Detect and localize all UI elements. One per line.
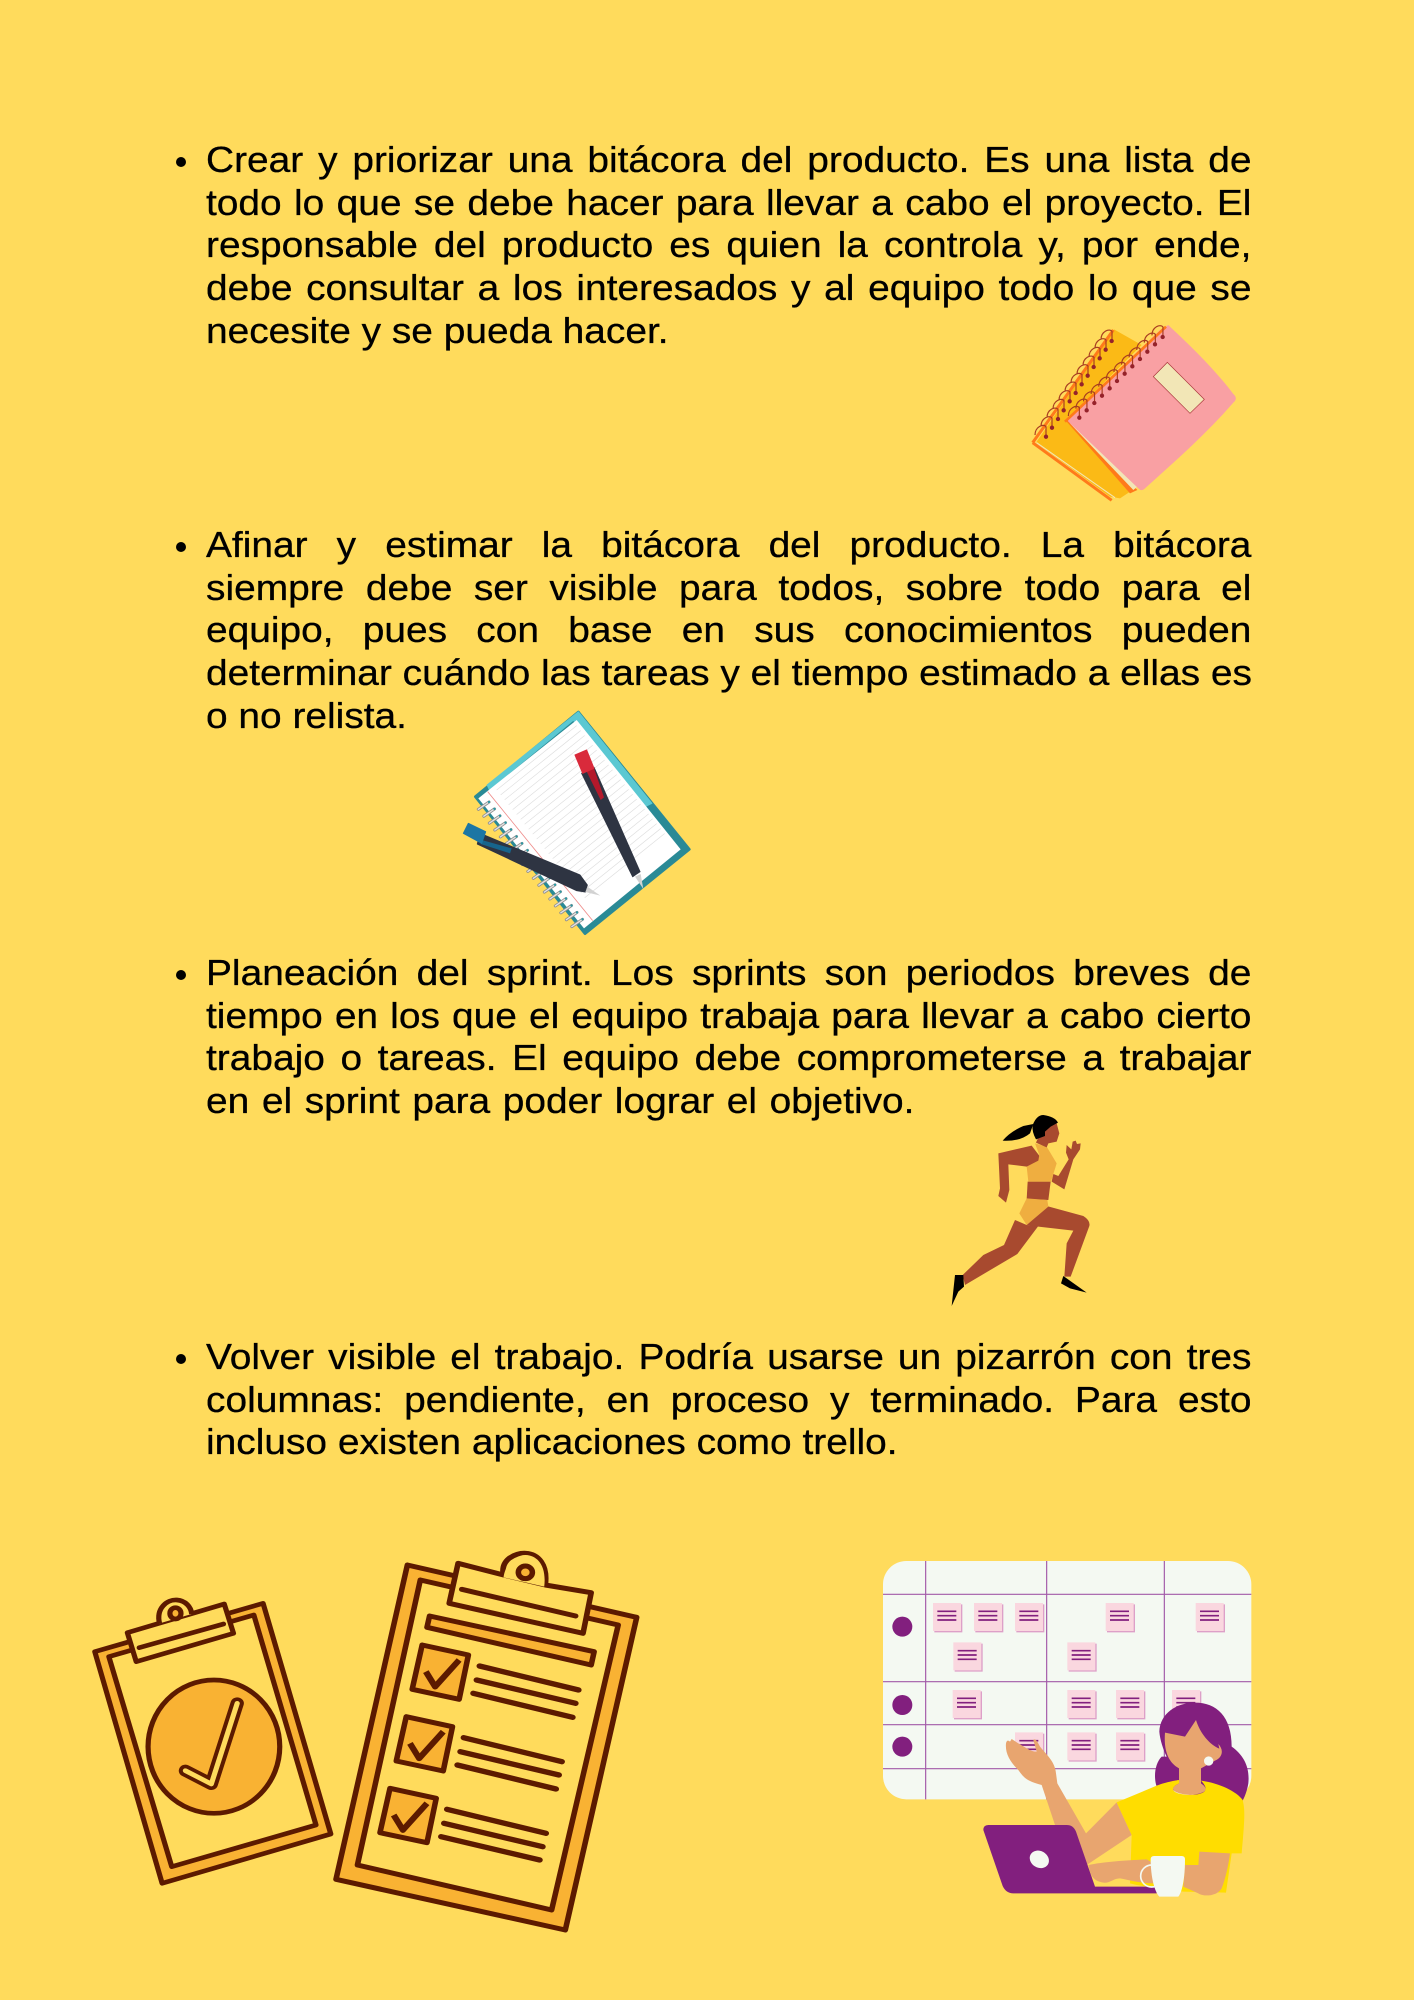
text block: afinar y estimar (176, 524, 1252, 736)
text block: afinar y estimar: Afinar y estimar la bitácora del producto. La bitácora (206, 524, 1251, 565)
text block: planeación del sprint: tiempo en los que el equipo trabaja para llevar a cabo cierto (206, 995, 1251, 1036)
text block: crear y priorizar: todo lo que se debe hacer para llevar a cabo el proyecto. El (206, 182, 1251, 223)
text block: crear y priorizar: debe consultar a los interesados y al equipo todo lo que se (206, 267, 1251, 308)
illustration: woman at kanban board (883, 1561, 1252, 1897)
bullet (176, 157, 186, 167)
woman (983, 1703, 1249, 1897)
coffee cup (1141, 1856, 1185, 1897)
text block: volver visible el trabajo: incluso existen aplicaciones como trello. (206, 1421, 898, 1462)
bullet (176, 970, 186, 980)
bullet (176, 542, 186, 552)
icons: clipboards (92, 1550, 640, 1932)
clipboard with checklist (336, 1553, 637, 1930)
bullet (176, 1354, 186, 1364)
text block: crear y priorizar: Crear y priorizar una bitácora del producto. Es una lista de (206, 139, 1251, 180)
text block: afinar y estimar: equipo, pues con base en sus conocimientos pueden (206, 609, 1251, 650)
text block: volver visible el trabajo: Volver visible el trabajo. Podría usarse un pizarrón con tres (206, 1336, 1251, 1377)
text block: planeación del sprint: trabajo o tareas. El equipo debe comprometerse a trabajar (206, 1037, 1251, 1078)
text block: crear y priorizar: responsable del producto es quien la controla y, por ende, (206, 224, 1251, 265)
icon: notebook with pens (462, 710, 691, 936)
text block: planeación del sprint: en el sprint para poder lograr el objetivo. (206, 1080, 914, 1121)
laptop (983, 1825, 1157, 1893)
blue pen (463, 823, 600, 896)
text block: afinar y estimar: o no relista. (206, 695, 407, 736)
text block: afinar y estimar: siempre debe ser visible para todos, sobre todo para el (206, 567, 1251, 608)
clipboard with round check (95, 1600, 331, 1883)
kanban board (883, 1561, 1251, 1799)
text block: crear y priorizar: necesite y se pueda hacer. (206, 310, 669, 351)
text block: planeación del sprint (176, 952, 1251, 1121)
text block: planeación del sprint: Planeación del sprint. Los sprints son periodos breves de (206, 952, 1251, 993)
text block: afinar y estimar: determinar cuándo las tareas y el tiempo estimado a ellas es (206, 652, 1252, 693)
text block: crear y priorizar (176, 139, 1251, 351)
icon: spiral notebooks (1032, 325, 1236, 502)
icon: running woman (952, 1115, 1090, 1306)
text block: volver visible el trabajo (176, 1336, 1251, 1462)
red pen (575, 750, 643, 889)
text block: volver visible el trabajo: columnas: pendiente, en proceso y terminado. Para esto (206, 1379, 1251, 1420)
